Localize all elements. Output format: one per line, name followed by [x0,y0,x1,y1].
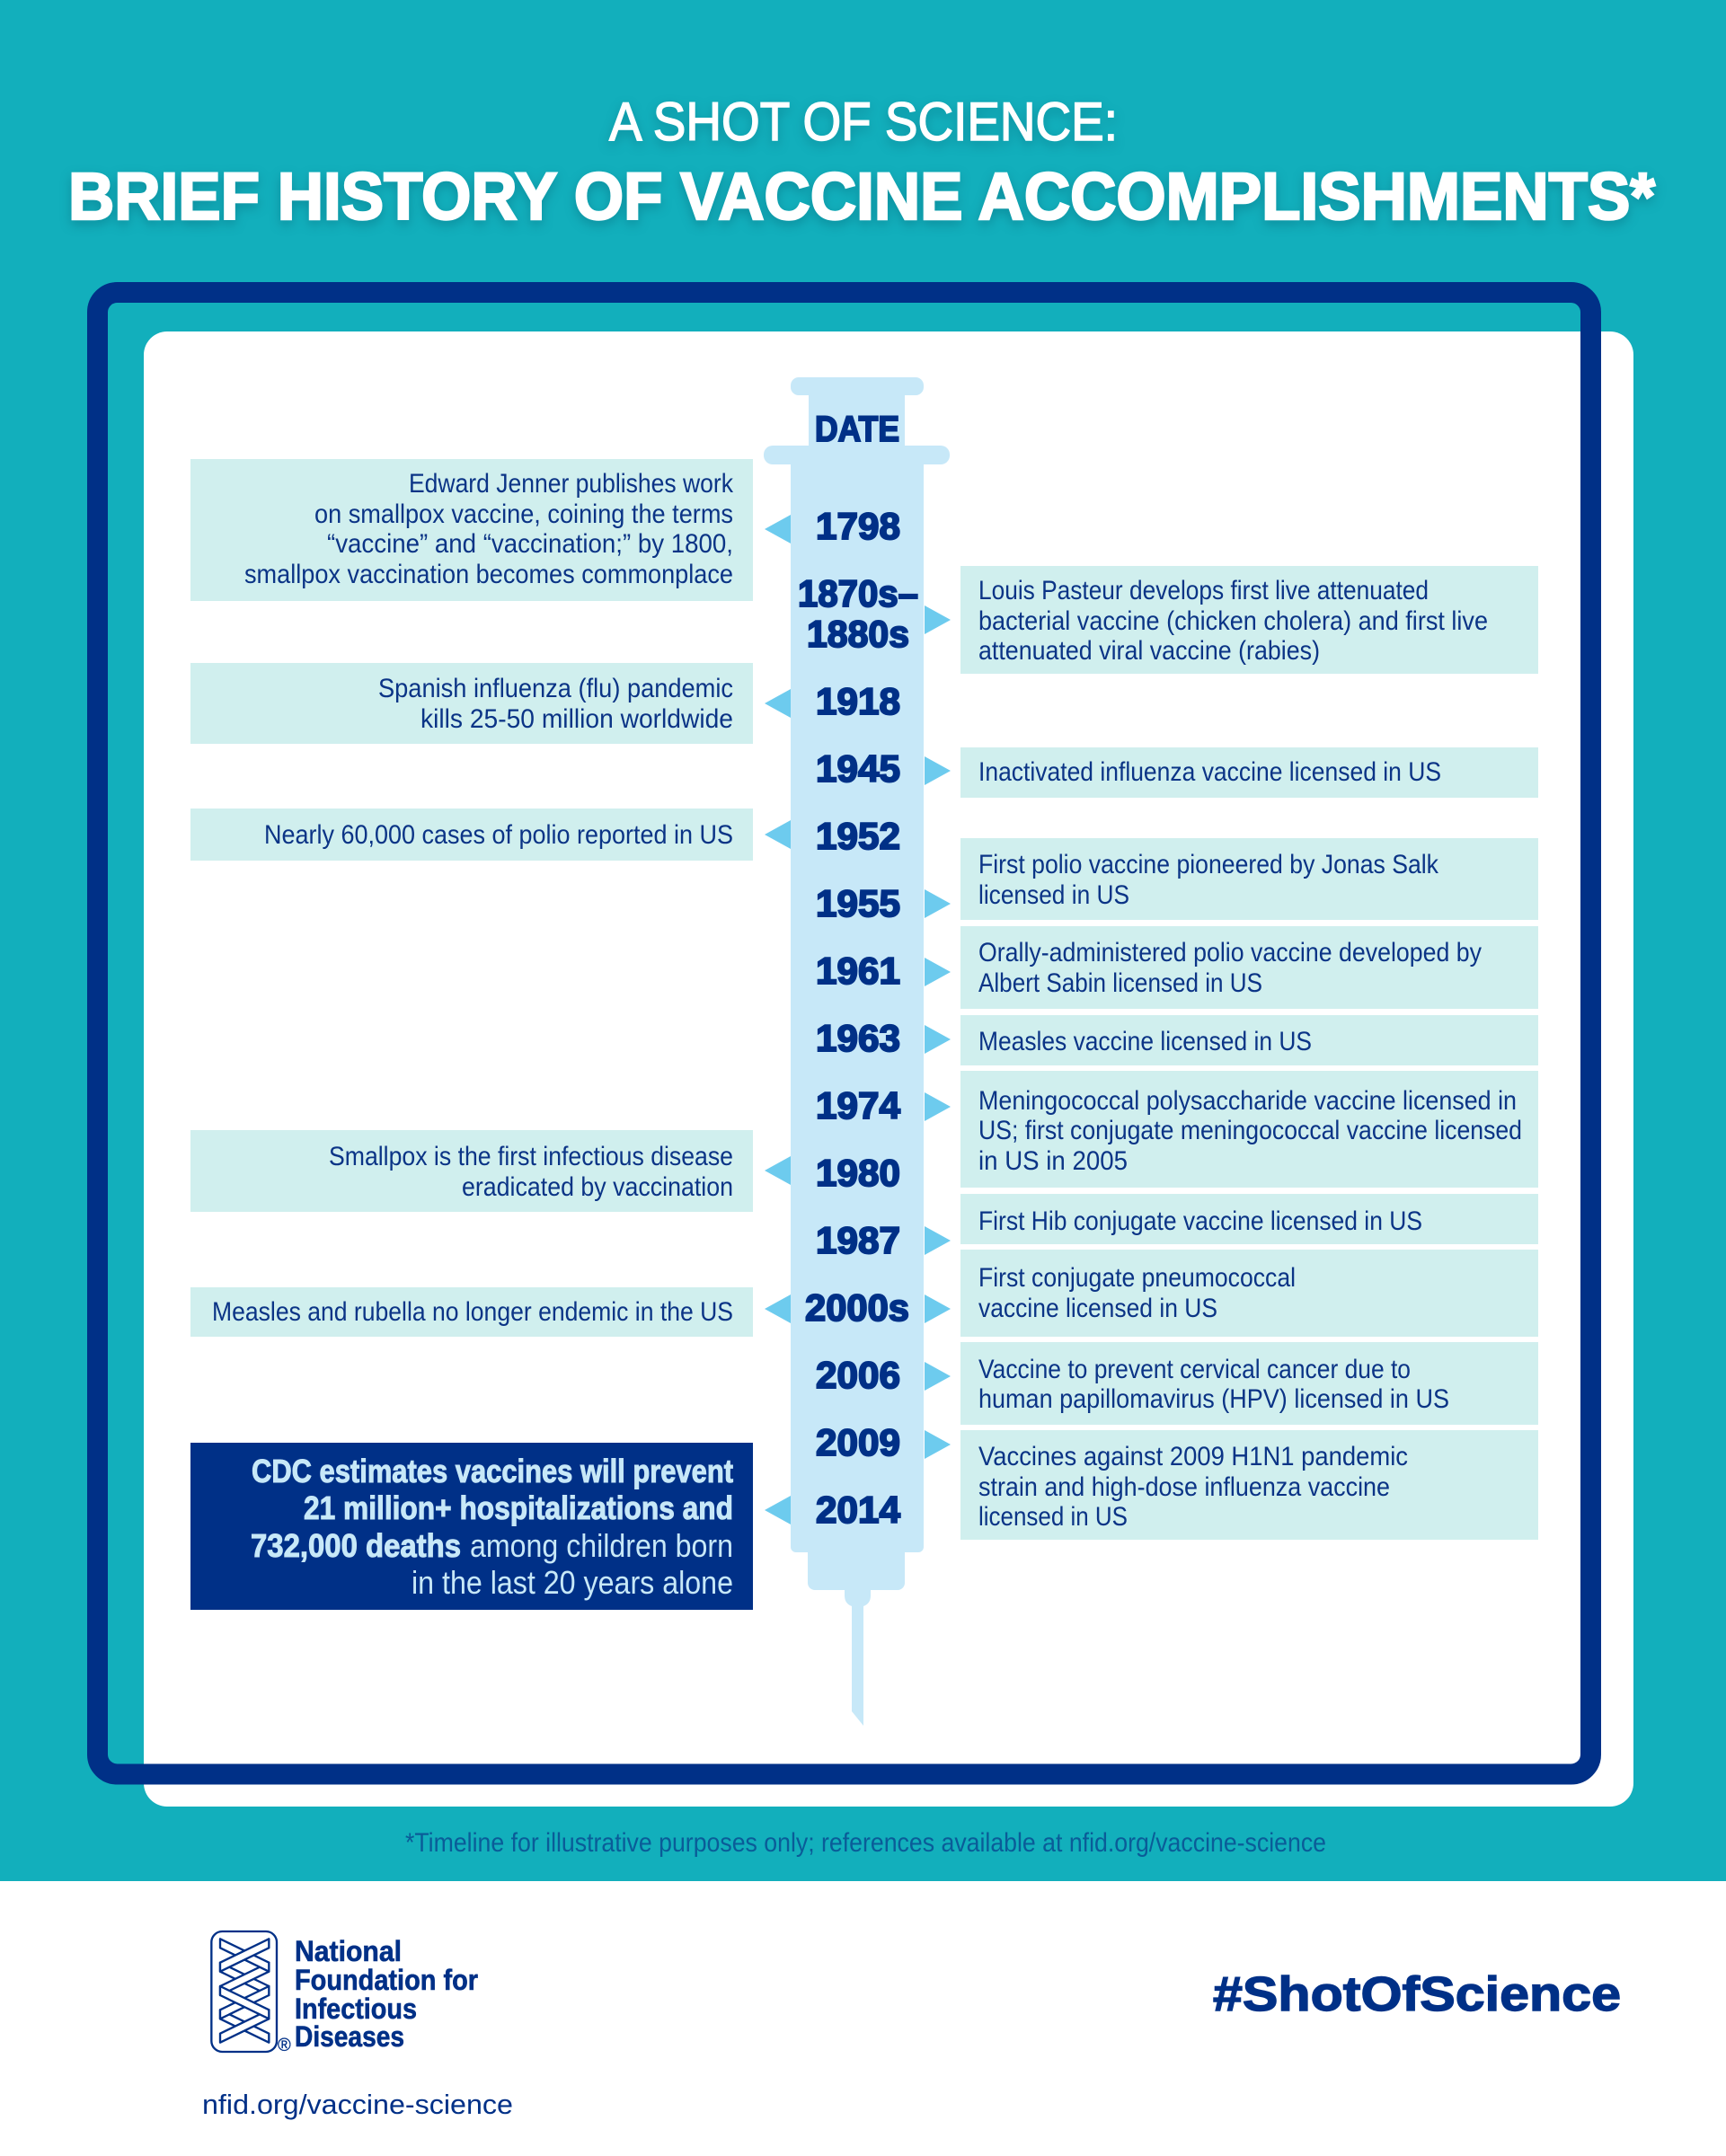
panel: 2006 HPV [960,1342,1538,1425]
organisation name: Diseases [295,2020,404,2053]
date labels: 2014 [816,1489,901,1531]
date labels: 1987 [816,1219,900,1261]
website url: nfid.org/vaccine-science [202,2089,513,2120]
panel: 1955 Salk [960,838,1538,920]
panel: white timeline card [144,331,1633,1807]
hashtag: #ShotOfScience [1213,1967,1621,2021]
panel: 1952 polio [190,808,753,861]
panel: 1798 Jenner: Edward Jenner publishes work [409,469,734,499]
title [68,92,1655,234]
panel: 2000s measles and rubella [190,1287,753,1337]
date labels: 1798 [816,505,900,547]
panel: 2014 CDC callout: among children born [470,1527,733,1564]
arrows pointing left [765,515,791,1524]
panel: 2009 H1N1: Vaccines against 2009 H1N1 pandemic [978,1442,1408,1471]
panel: 1870s Pasteur [960,566,1538,674]
panel: navy frame [97,293,1590,1774]
date labels: 1952 [816,815,900,857]
panel: 1918 influenza [190,663,753,744]
panel: 2006 HPV: Vaccine to prevent cervical cancer due to [978,1355,1411,1384]
panel: 1980 smallpox [190,1130,753,1212]
panel: 1955 Salk: First polio vaccine pioneered by Jonas Salk [978,850,1439,879]
panel: 1980 smallpox: Smallpox is the first infectious disease [329,1142,733,1171]
panel: 1963 measles vaccine [960,1015,1538,1065]
panel: 2014 CDC callout: 732,000 deaths [251,1527,461,1564]
panel: 2000s measles and rubella: Measles and rubella no longer endemic in the US [212,1297,733,1327]
icon: syringe [764,377,950,1726]
organisation name: Infectious [295,1993,417,2025]
title: A SHOT OF SCIENCE: [609,92,1118,152]
panel: 1961 Sabin: Orally-administered polio vaccine developed by [978,938,1482,968]
date labels: 2000s [805,1286,909,1329]
panel: 1870s Pasteur: Louis Pasteur develops first live attenuated [978,576,1429,605]
panel: 2000s pneumococcal: vaccine licensed in US [978,1294,1217,1323]
panel: 1945 influenza vaccine [960,747,1538,798]
date labels: 1945 [816,747,900,790]
panel: 2009 H1N1: licensed in US [978,1502,1128,1532]
panel: 2009 H1N1: strain and high-dose influenza vaccine [978,1472,1390,1502]
panel: 1974 meningococcal: Meningococcal polysaccharide vaccine licensed in [978,1086,1517,1116]
panel: 1798 Jenner: on smallpox vaccine, coining the terms [314,499,733,529]
date labels: 1918 [816,680,900,722]
panel: 1918 influenza: Spanish influenza (flu) pandemic [378,674,733,703]
panel: 1798 Jenner: smallpox vaccination becomes commonplace [244,560,733,589]
panel: 2014 CDC callout [190,1443,753,1610]
icon: NFID DNA logo [211,1931,277,2052]
date labels: 1963 [816,1017,900,1059]
panel: 1961 Sabin [960,926,1538,1009]
date labels: 1870s– [798,572,918,614]
panel: 1952 polio: Nearly 60,000 cases of polio reported in US [264,820,733,850]
organisation name: ® [278,2036,291,2055]
panel: 1980 smallpox: eradicated by vaccination [462,1172,733,1202]
organisation name [278,1935,478,2055]
organisation name: Foundation for [295,1964,478,1996]
panel: 1974 meningococcal: US; first conjugate meningococcal vaccine licensed [978,1116,1522,1145]
panel: 1974 meningococcal: in US in 2005 [978,1146,1128,1176]
date labels: 1961 [816,950,900,992]
heading: date: DATE [815,410,899,449]
panel: 1961 Sabin: Albert Sabin licensed in US [978,968,1262,998]
date labels: 2006 [816,1354,900,1396]
panel: 2009 H1N1 [960,1430,1538,1540]
panel: 1963 measles vaccine: Measles vaccine licensed in US [978,1027,1312,1056]
panel: 2014 CDC callout: CDC estimates vaccines will prevent [252,1453,733,1489]
title: BRIEF HISTORY OF VACCINE ACCOMPLISHMENTS* [68,159,1655,234]
panel: 1918 influenza: kills 25-50 million worldwide [420,704,733,734]
panel: 2000s pneumococcal [960,1250,1538,1337]
panel: 1870s Pasteur: bacterial vaccine (chicken cholera) and first live [978,606,1488,636]
arrows pointing right [925,605,951,1459]
panel: 1945 influenza vaccine: Inactivated influenza vaccine licensed in US [978,757,1441,787]
organisation name: National [295,1935,402,1967]
date labels: 2009 [816,1421,900,1463]
panel: 1987 Hib: First Hib conjugate vaccine licensed in US [978,1206,1422,1236]
panel: 1798 Jenner [190,459,753,601]
panel: 2000s pneumococcal: First conjugate pneumococcal [978,1263,1296,1293]
panel: 1798 Jenner: “vaccine” and “vaccination;” by 1800, [327,529,733,559]
panel: 1870s Pasteur: attenuated viral vaccine (rabies) [978,636,1320,666]
panel: 2014 CDC callout: 21 million+ hospitalizations and [304,1489,733,1526]
panel: 2014 CDC callout: in the last 20 years alone [412,1564,733,1601]
panel: 2006 HPV: human papillomavirus (HPV) licensed in US [978,1384,1449,1414]
panel: 1955 Salk: licensed in US [978,880,1129,910]
date labels [798,505,918,1531]
panel: 1974 meningococcal [960,1071,1538,1188]
date labels: 1980 [816,1152,900,1194]
footnote: *Timeline for illustrative purposes only; references available at nfid.org/vaccine-science [405,1828,1326,1858]
date labels: 1974 [816,1084,901,1127]
date labels: 1880s [807,613,909,655]
date labels: 1955 [816,882,900,924]
panel: 1987 Hib [960,1194,1538,1244]
